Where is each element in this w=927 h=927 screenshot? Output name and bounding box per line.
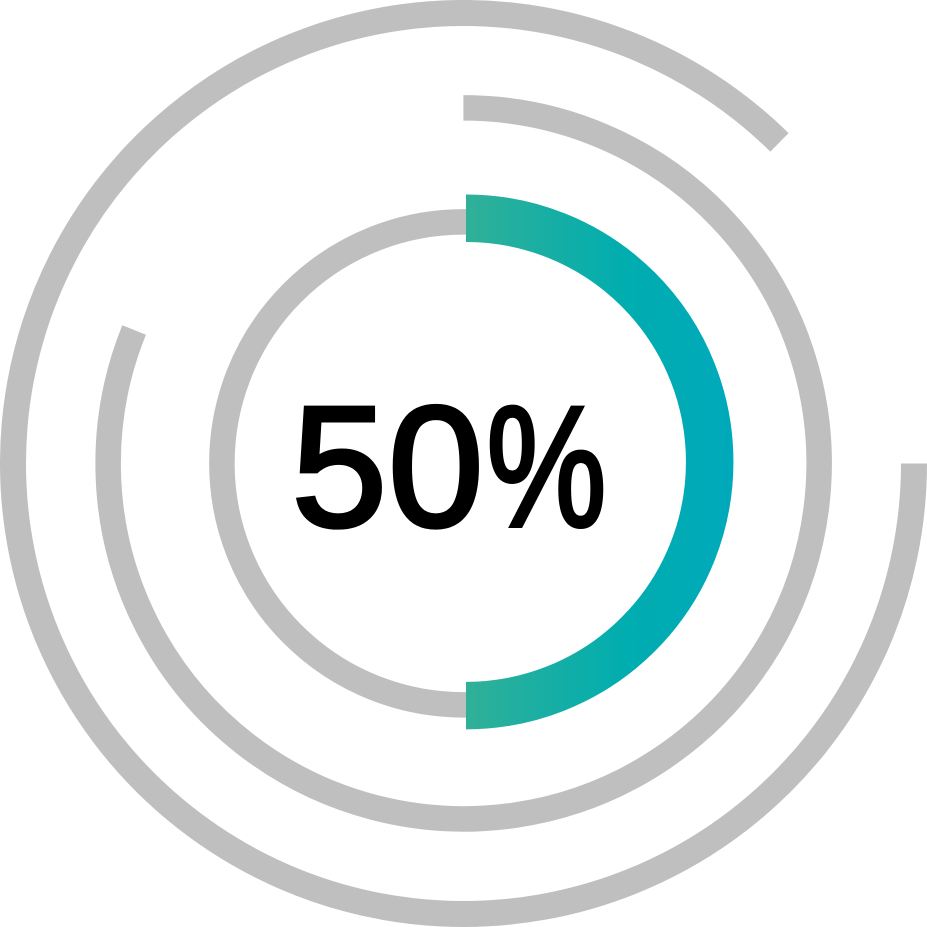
inner grey half ring xyxy=(222,222,466,705)
teal progress half ring xyxy=(466,218,710,706)
percentage label: % xyxy=(486,371,606,563)
middle grey arc xyxy=(108,108,819,819)
percentage label: 0 xyxy=(388,371,484,563)
percentage label: 5 xyxy=(292,371,387,563)
percentage label xyxy=(292,371,606,563)
